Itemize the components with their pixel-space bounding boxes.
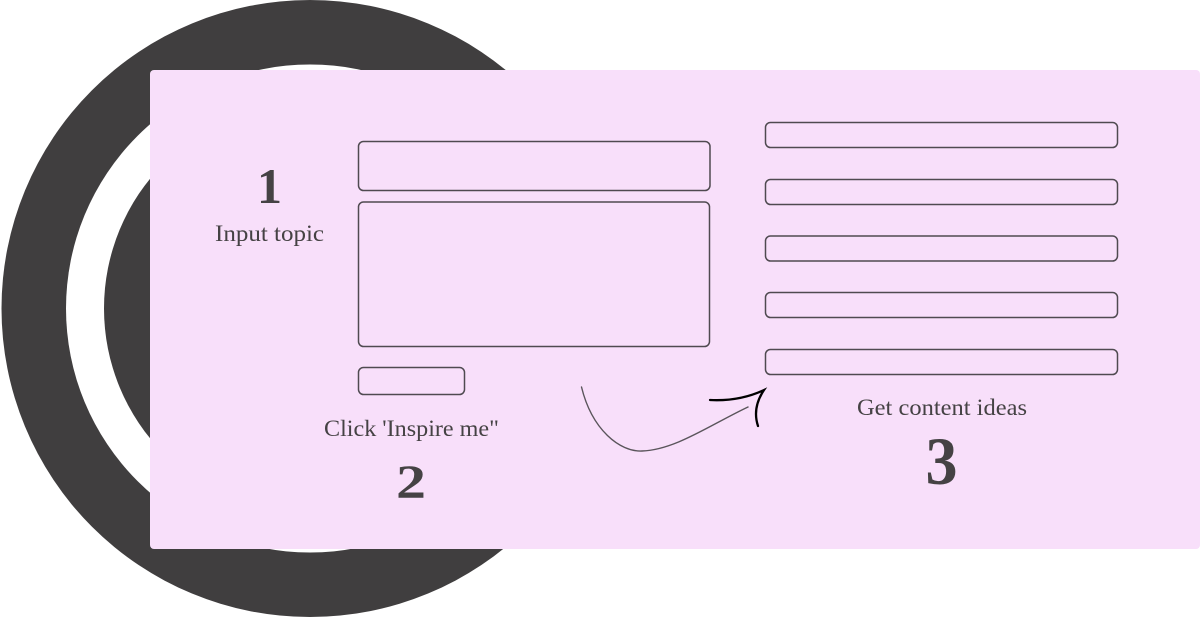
- form: inspire me button: [358, 368, 464, 394]
- form: topic input box: [358, 142, 710, 190]
- step 2: label: Click 'Inspire me": [324, 416, 499, 442]
- arrow: from button to results: [582, 387, 764, 451]
- step 3: label: Get content ideas: [857, 395, 1027, 421]
- step 3: number: 3: [926, 423, 958, 499]
- results: content idea rows: [766, 122, 1118, 374]
- panel: pink workflow card: [150, 70, 1200, 549]
- icon: concentric background circles: [2, 0, 618, 617]
- step 1: label: Input topic: [215, 221, 324, 247]
- step 2: number: 2: [396, 456, 426, 509]
- step 1: number: 1: [257, 158, 282, 214]
- form: description text area: [358, 202, 710, 346]
